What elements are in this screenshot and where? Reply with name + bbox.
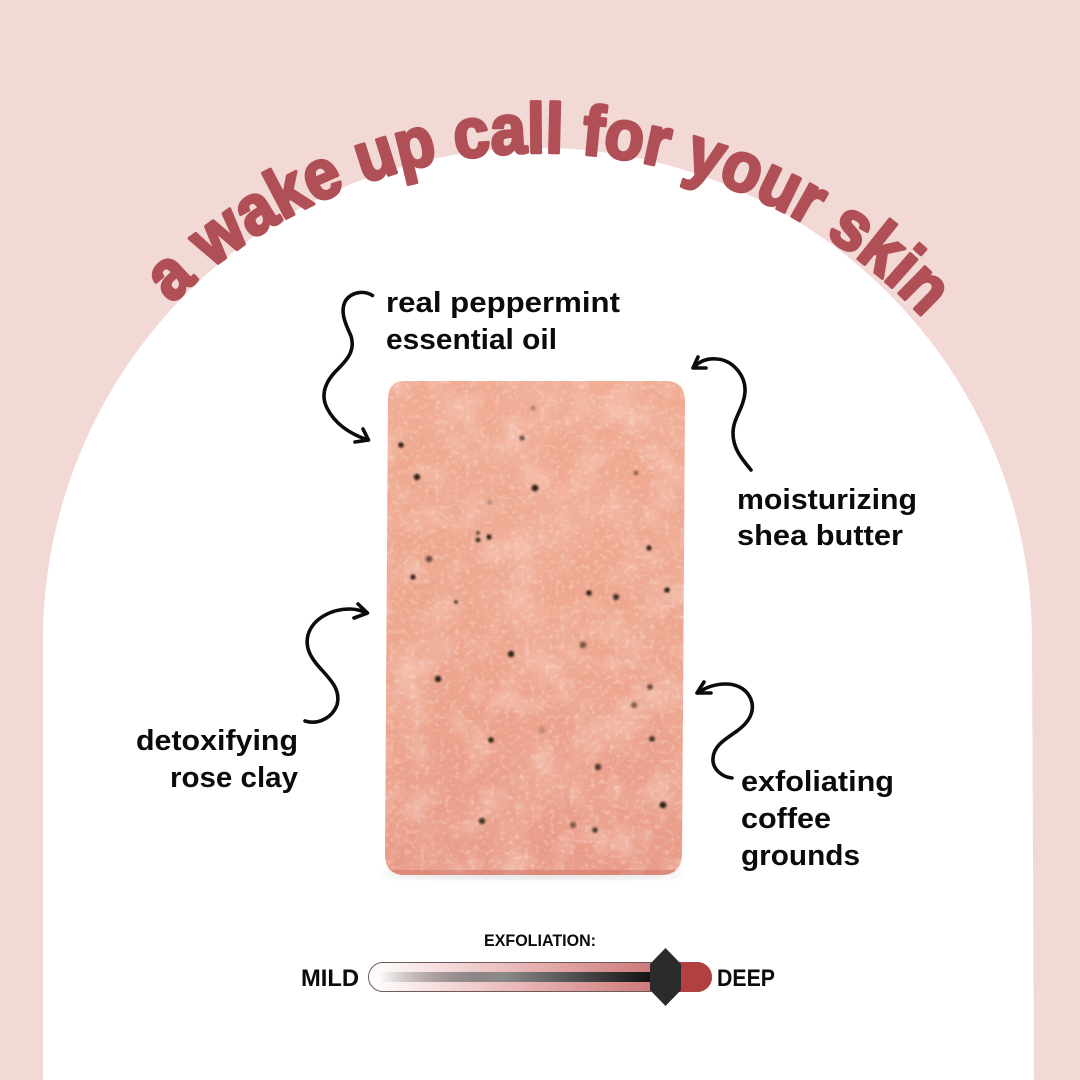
callout: shea butter <box>693 357 917 552</box>
slider title: EXFOLIATION: <box>484 932 596 950</box>
label: rose clay: rose clay <box>170 762 298 794</box>
title: curved heading: a wake up call for your skin <box>152 100 944 317</box>
slider filled end <box>675 962 712 992</box>
slider knob <box>650 948 681 1006</box>
callout: peppermint oil <box>324 287 620 442</box>
label: rose clay: detoxifying <box>136 725 298 757</box>
arrow: coffee grounds <box>697 682 752 778</box>
label: peppermint oil: essential oil <box>386 324 557 356</box>
coffee ground speckles <box>398 405 670 833</box>
exfoliation slider <box>301 932 775 1006</box>
label: coffee grounds: exfoliating <box>741 766 894 798</box>
label: shea butter: moisturizing <box>737 484 917 516</box>
soap bar <box>380 375 690 880</box>
label: shea butter: shea butter <box>737 520 903 552</box>
white arch panel <box>43 148 1034 1080</box>
label: peppermint oil: real peppermint <box>386 287 620 319</box>
arrow: rose clay <box>305 604 368 722</box>
slider track <box>368 962 712 992</box>
label: coffee grounds: grounds <box>741 840 860 872</box>
label: deep: DEEP <box>717 965 775 992</box>
arrow: shea butter <box>693 357 751 470</box>
callout: coffee grounds <box>697 682 894 872</box>
slider inner bar <box>380 972 652 982</box>
label: mild: MILD <box>301 965 359 992</box>
label: coffee grounds: coffee <box>741 803 831 835</box>
arrow: peppermint oil <box>324 292 372 442</box>
callout: rose clay <box>136 604 368 794</box>
